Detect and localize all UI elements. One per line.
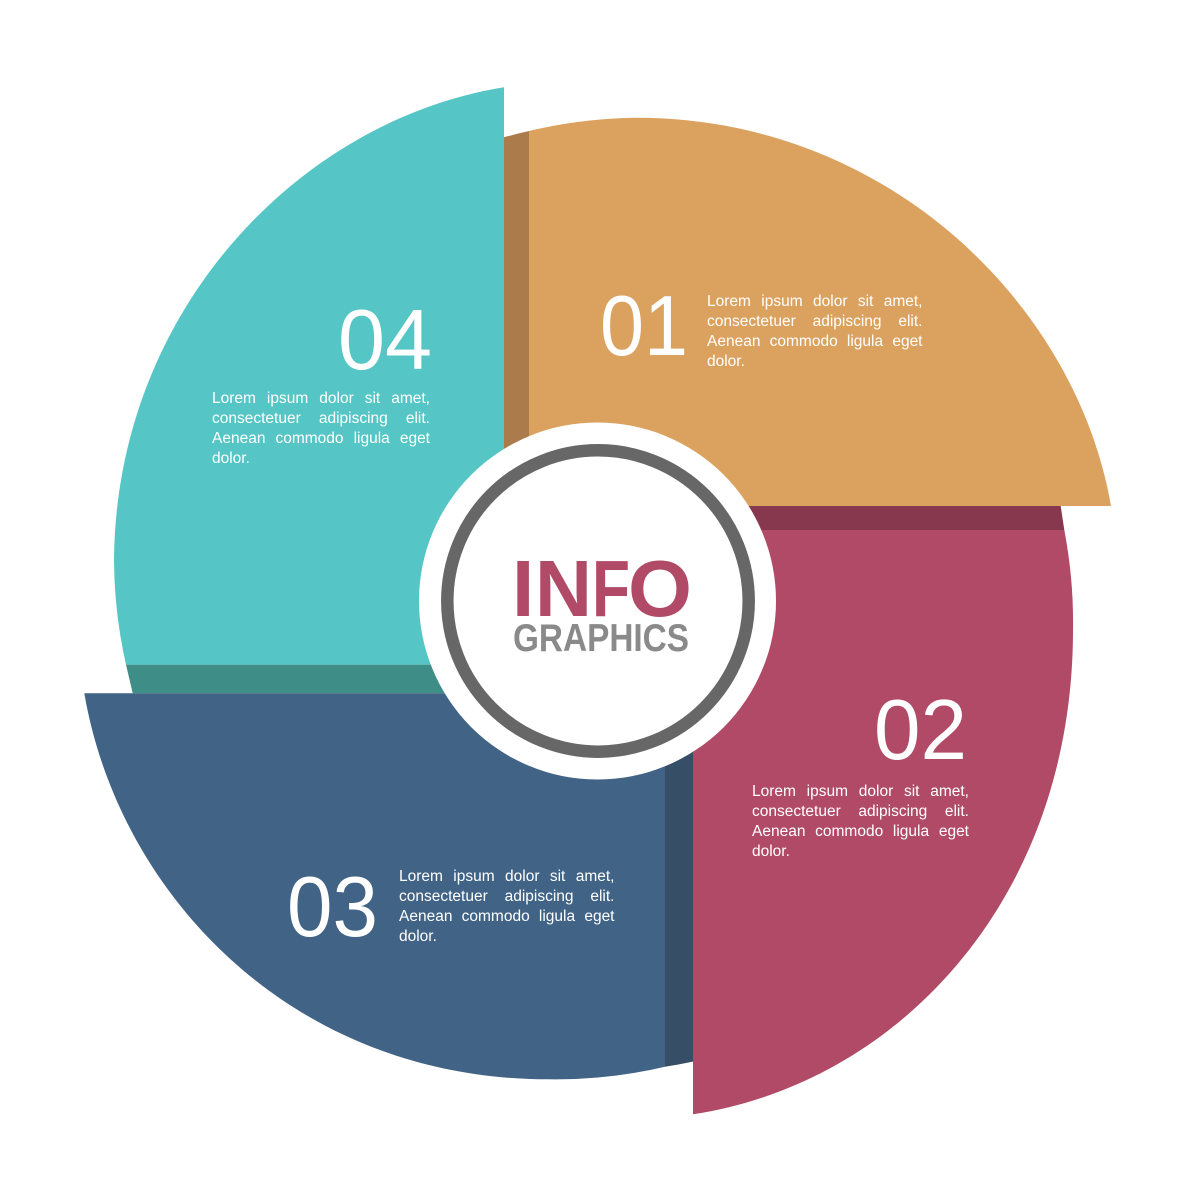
grey ring: [447, 450, 749, 752]
orange segment shape: [529, 118, 1111, 506]
text block 04: [212, 389, 430, 471]
text block 03: Lorem ipsum dolor sit amet,: [399, 868, 614, 885]
teal segment shadow strip: [126, 665, 460, 693]
center badge: [419, 422, 776, 780]
text block 03: [399, 867, 614, 949]
text block 04: Lorem ipsum dolor sit amet,: [212, 390, 430, 407]
text block 03: consectetuer adipiscing elit.: [399, 888, 614, 905]
text block 01: Aenean commodo ligula eget: [707, 333, 922, 350]
number 01: 01: [600, 279, 688, 374]
panel: 03 blue segment: [84, 693, 694, 1079]
blue segment shape: [84, 693, 665, 1079]
white center disc: [419, 422, 776, 780]
text block 04: consectetuer adipiscing elit.: [212, 410, 430, 427]
text block 04: Aenean commodo ligula eget: [212, 430, 430, 447]
title: INFO: I: [512, 544, 534, 633]
text block 01: Lorem ipsum dolor sit amet,: [707, 293, 922, 310]
title: INFO: N: [535, 544, 592, 633]
blue segment shadow strip: [665, 720, 694, 1067]
text block 02: dolor.: [752, 843, 790, 860]
title: INFO: [512, 544, 692, 633]
text block 01: dolor.: [707, 353, 745, 370]
text block 02: [752, 782, 969, 864]
subtitle: GRAPHICS: GRAPHICS: [513, 617, 689, 660]
panel: 01 orange segment: [504, 118, 1111, 506]
panel: 02 red segment: [693, 506, 1073, 1114]
orange segment shadow strip: [504, 131, 529, 480]
text block 01: [707, 292, 922, 374]
text block 02: Lorem ipsum dolor sit amet,: [752, 783, 969, 800]
text block 03: Aenean commodo ligula eget: [399, 908, 614, 925]
teal segment shape: [114, 87, 504, 665]
title: INFO: F: [592, 544, 630, 633]
text block 04: dolor.: [212, 450, 250, 467]
number 04: 04: [338, 293, 432, 388]
panel: 04 teal segment: [114, 87, 504, 693]
text block 02: Aenean commodo ligula eget: [752, 823, 969, 840]
text block 02: consectetuer adipiscing elit.: [752, 803, 969, 820]
text block 03: dolor.: [399, 928, 437, 945]
number 02: 02: [874, 683, 967, 778]
text block 01: consectetuer adipiscing elit.: [707, 313, 922, 330]
red segment shape: [693, 530, 1073, 1114]
title: INFO: O: [628, 544, 692, 633]
number 03: 03: [287, 860, 378, 955]
red segment shadow strip: [720, 506, 1064, 530]
